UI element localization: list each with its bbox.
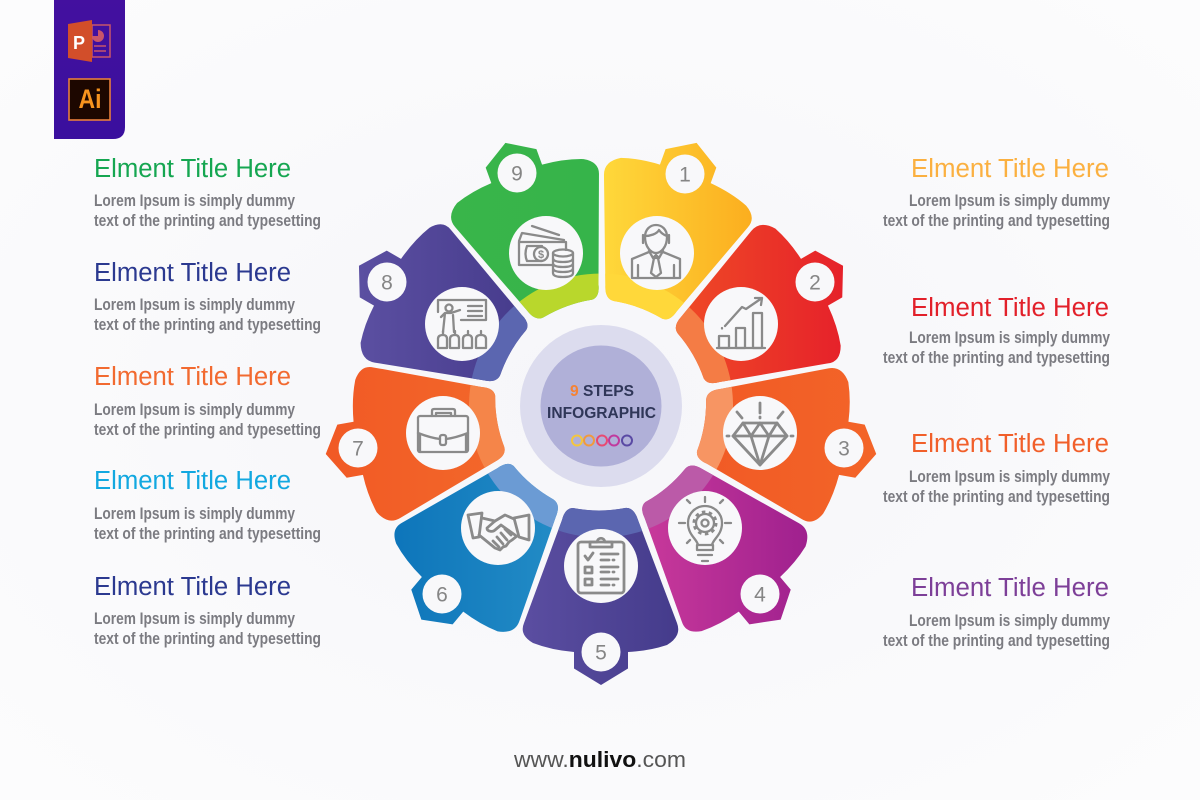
left text column (94, 155, 321, 648)
badge: software formats (54, 0, 125, 139)
text: element 2: text of the printing and typesetting (883, 349, 1110, 367)
step 9 segment (451, 142, 599, 318)
number 8 (368, 262, 406, 302)
hub rings (572, 436, 632, 446)
icon: PowerPoint: P (73, 33, 85, 53)
text: element 1: text of the printing and typesetting (883, 212, 1110, 230)
text: element 6: Lorem Ipsum is simply dummy (94, 505, 296, 523)
text: element 3: text of the printing and typesetting (883, 488, 1110, 506)
text: element 6: text of the printing and typesetting (94, 525, 321, 543)
number 6 (422, 574, 462, 614)
text: element 9 (94, 155, 321, 230)
number 9 (498, 154, 536, 192)
icon: handshake (468, 513, 529, 550)
icon: checklist clipboard (578, 538, 624, 593)
number 9: 9 (511, 162, 523, 186)
text: element 5: Elment Title Here (94, 573, 291, 601)
text: element 5: text of the printing and typesetting (94, 630, 321, 648)
text: element 6 (94, 467, 321, 543)
text: element 8: Elment Title Here (94, 259, 291, 287)
text: element 8: text of the printing and typesetting (94, 316, 321, 334)
website footer: www.nulivo.com (513, 747, 686, 772)
text: element 8: Lorem Ipsum is simply dummy (94, 296, 296, 314)
number 8: 8 (381, 272, 393, 294)
text: element 1 (883, 155, 1111, 230)
icon: presentation (438, 300, 486, 348)
number 1: 1 (679, 164, 691, 186)
step 3 segment (696, 368, 876, 522)
step 4 segment (642, 466, 808, 632)
number 2: 2 (809, 272, 821, 294)
icon: briefcase (418, 409, 468, 452)
center hub (520, 325, 682, 487)
text: element 2: Elment Title Here (911, 294, 1109, 322)
number 4 (740, 574, 780, 614)
number 5: 5 (595, 642, 607, 664)
number 6: 6 (436, 584, 448, 606)
icon: businessman (632, 225, 680, 278)
text: element 7: text of the printing and typesetting (94, 421, 321, 439)
step 8 segment (358, 224, 528, 382)
text: element 7: Elment Title Here (94, 363, 291, 391)
text: element 1: Lorem Ipsum is simply dummy (909, 192, 1111, 210)
text: element 5: Lorem Ipsum is simply dummy (94, 610, 296, 628)
step 1 segment (604, 142, 752, 320)
number 3 (824, 428, 864, 468)
text: element 9: Elment Title Here (94, 155, 291, 183)
text: element 7 (94, 363, 321, 439)
text: element 4: Lorem Ipsum is simply dummy (909, 612, 1111, 630)
step 2 segment (676, 224, 844, 384)
text: element 4: Elment Title Here (911, 574, 1109, 602)
number 3: 3 (838, 438, 850, 460)
text: element 5 (94, 573, 321, 648)
number 4: 4 (754, 584, 766, 606)
icon: money and coins (519, 226, 573, 277)
icon: money and coins: $ (538, 249, 544, 261)
text: element 2 (883, 294, 1111, 367)
step 5 segment (523, 508, 678, 685)
hub title (547, 383, 656, 422)
number 7: 7 (352, 438, 364, 460)
text: element 4 (883, 574, 1111, 650)
text: element 9: Lorem Ipsum is simply dummy (94, 192, 296, 210)
number 1 (666, 154, 704, 194)
number 5 (582, 632, 620, 672)
step 6 segment (394, 464, 558, 632)
text: element 7: Lorem Ipsum is simply dummy (94, 401, 296, 419)
hub title: 9 STEPS (570, 383, 634, 400)
text: element 8 (94, 259, 321, 334)
hub title: INFOGRAPHIC (547, 405, 656, 422)
icon: Illustrator: Ai (78, 84, 102, 114)
icon: diamond (727, 403, 793, 465)
icon: growth chart (717, 298, 765, 348)
right text column (883, 155, 1111, 650)
step 7 segment (326, 367, 505, 521)
number 2 (796, 262, 834, 302)
text: element 2: Lorem Ipsum is simply dummy (909, 329, 1111, 347)
text: element 3: Lorem Ipsum is simply dummy (909, 468, 1111, 486)
text: element 3: Elment Title Here (911, 430, 1109, 458)
number 7 (338, 428, 378, 468)
text: element 6: Elment Title Here (94, 467, 291, 495)
text: element 9: text of the printing and typesetting (94, 212, 321, 230)
text: element 3 (883, 430, 1111, 506)
text: element 1: Elment Title Here (911, 155, 1109, 183)
icon: light bulb with gear (679, 497, 731, 561)
text: element 4: text of the printing and typesetting (883, 632, 1110, 650)
